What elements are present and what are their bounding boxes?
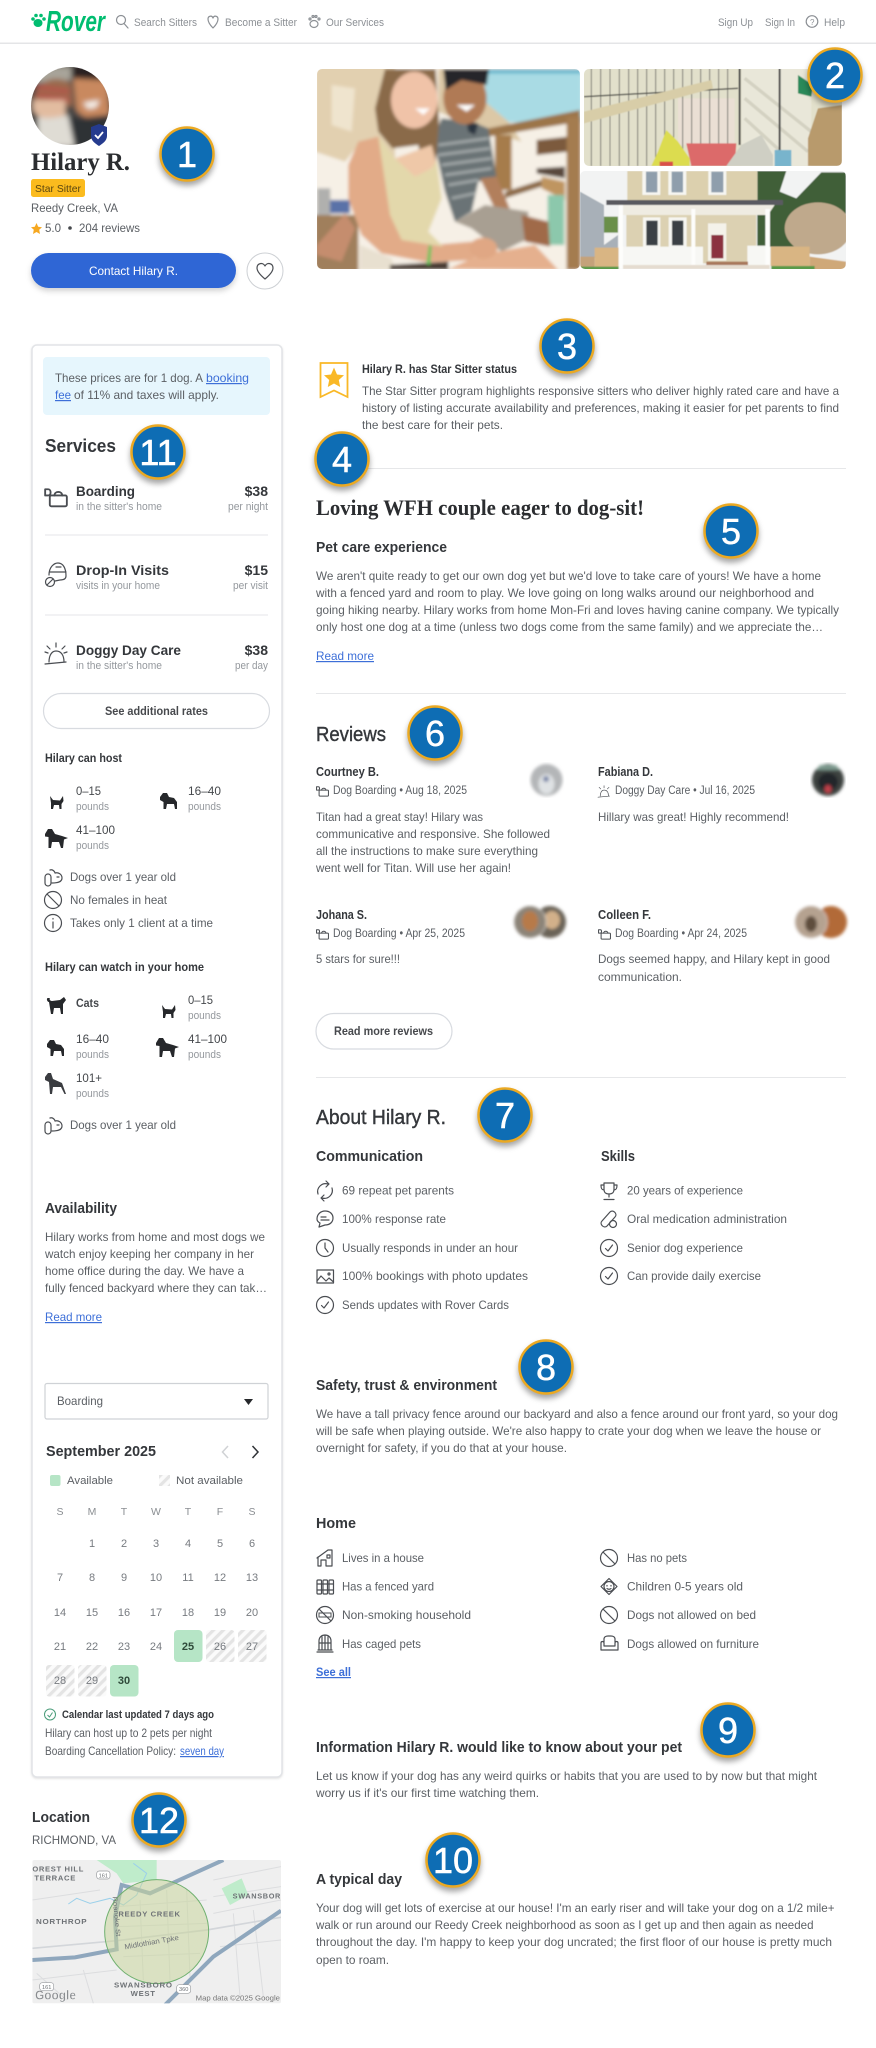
panel: services and availability card (32, 345, 282, 1777)
map (32, 1860, 281, 2005)
review: Fabiana D.: Fabiana D. (598, 765, 653, 779)
section: about hilary: About Hilary R. (316, 1107, 446, 1129)
item: rover cards: Sends updates with Rover Cards (342, 1298, 509, 1312)
nav: become a sitter: Become a Sitter (225, 17, 297, 29)
price notice: These prices are for 1 dog. A (55, 371, 203, 385)
review: Colleen F. (598, 906, 847, 984)
section: availability text (44, 1200, 267, 1324)
item: caged pets: Has caged pets (342, 1637, 421, 1651)
star sitter tag (31, 179, 85, 197)
map: REEDY CREEK (118, 1910, 181, 1919)
callout badge 3: 3 (557, 326, 577, 367)
calendar day cells: 15 (86, 1607, 98, 1619)
review: Fabiana D.: Doggy Day Care • Jul 16, 2025 (615, 785, 755, 797)
section: availability text: watch enjoy keeping her company in her (44, 1247, 254, 1261)
item: repeat pet parents (318, 1181, 454, 1201)
section: location: Location (32, 1809, 90, 1826)
size: 16-40 pounds: 16–40 (188, 784, 221, 798)
price notice: booking (206, 371, 249, 385)
sitter name: Hilary R. (31, 149, 130, 176)
host condition: no females in heat: No females in heat (70, 893, 168, 907)
calendar legend: Available (67, 1475, 113, 1487)
map: OREST HILL (32, 1865, 84, 1874)
calendar footer notes: seven day (180, 1744, 224, 1758)
item: house (317, 1550, 424, 1566)
item: fenced yard: Has a fenced yard (342, 1580, 434, 1594)
profile headline: Loving WFH couple eager to dog-sit! (316, 495, 644, 520)
calendar day cells: 18 (182, 1607, 194, 1619)
item: senior dogs: Senior dog experience (627, 1241, 743, 1255)
calendar day cells: 22 (86, 1641, 98, 1653)
review: Johana S.: 5 stars for sure!!! (316, 952, 400, 966)
star sitter status block: The Star Sitter program highlights responsive sitters who deliver highly rated care and have a (362, 384, 839, 398)
callout badge 7 (478, 1088, 532, 1142)
watch condition: age: Dogs over 1 year old (70, 1118, 176, 1132)
price notice: fee (55, 388, 71, 402)
calendar day cells: 2 (121, 1538, 127, 1550)
callout badge 1: 1 (177, 134, 197, 175)
photo: house with porch (578, 168, 851, 272)
calendar day cells: W (151, 1506, 161, 1518)
contact button: Contact Hilary R. (89, 264, 178, 278)
item: response time: Usually responds in under an hour (342, 1241, 518, 1255)
size: 41-100 pounds: 41–100 (188, 1032, 227, 1046)
section: a typical day: walk or run around our Reedy Creek neighborhood as soon as I get up and then again as needed (315, 1918, 814, 1932)
callout badge 6 (408, 706, 462, 760)
favorite heart button (247, 253, 283, 289)
item: response rate: 100% response rate (342, 1212, 446, 1226)
nav: our services (309, 16, 384, 29)
review: Colleen F.: communication. (598, 970, 682, 984)
section: safety, trust and environment: We have a tall privacy fence around our backyard and also a fence around our front yard, so your dog (316, 1407, 838, 1421)
calendar day cells: 29 (86, 1675, 98, 1687)
calendar day cells: 1 (89, 1538, 95, 1550)
size: 0-15 pounds: pounds (76, 801, 109, 813)
item: rover cards (316, 1296, 509, 1314)
sitter avatar photo (31, 67, 109, 145)
calendar day cells: S (248, 1506, 256, 1518)
review: Courtney B.: went well for Titan. Will use her again! (315, 861, 511, 875)
size: 16-40 pounds: 16–40 (76, 1032, 109, 1046)
callout badge 4 (316, 432, 368, 486)
section: hilary can watch in your home: Hilary can watch in your home (45, 960, 204, 974)
calendar legend (50, 1475, 243, 1487)
section: availability text: fully fenced backyard where they can tak… (45, 1281, 267, 1295)
callout badge 11: 11 (139, 432, 177, 473)
section: a typical day: Your dog will get lots of exercise at our house! I'm an early riser and will take your dog on a 1/2 mile+ (316, 1901, 834, 1915)
price notice (43, 357, 270, 415)
map: Midlothian Tpke (124, 1933, 180, 1951)
review: Colleen F.: Dogs seemed happy, and Hilary kept in good (598, 952, 830, 966)
map: SWANSBOR (233, 1891, 281, 1900)
calendar day cells: 7 (57, 1572, 63, 1584)
item: bed rule (600, 1606, 756, 1624)
callout badge 3 (540, 320, 594, 372)
calendar day cells: 10 (150, 1572, 162, 1584)
callout badge 8: 8 (536, 1347, 556, 1388)
section: availability text: Hilary works from home and most dogs we (45, 1230, 265, 1244)
size: 41-100 pounds (45, 823, 115, 852)
service: drop-in visits: per visit (233, 580, 268, 592)
section: pet care experience (315, 539, 839, 663)
size: 41-100 pounds: 41–100 (76, 823, 115, 837)
calendar day cells: 20 (246, 1607, 258, 1619)
photo: couple on a deck (315, 65, 582, 272)
section: pet care experience: Pet care experience (316, 539, 447, 556)
section: home: Home (316, 1515, 356, 1532)
section: pet care experience: Read more (316, 649, 374, 663)
size: 101+ pounds: 101+ (76, 1071, 102, 1085)
calendar day cells: 9 (121, 1572, 127, 1584)
section: a typical day: throughout the day. I'm happy to keep your dog uncrated; the first floor of our house is pretty much (316, 1935, 832, 1949)
review: Courtney B.: Titan had a great stay! Hilary was (316, 810, 483, 824)
calendar day cells: 3 (153, 1538, 159, 1550)
read more reviews button (316, 1014, 452, 1049)
host condition: one client: Takes only 1 client at a time (70, 916, 213, 930)
communication list (316, 1148, 528, 1314)
callout badge 11 (132, 426, 184, 478)
calendar day cells: 21 (54, 1641, 66, 1653)
section: hilary can host: Hilary can host (45, 751, 122, 765)
reviewer avatars (514, 906, 566, 938)
item: daily exercise: Can provide daily exercise (627, 1269, 761, 1283)
service: boarding: $38 (245, 483, 268, 499)
review: Colleen F.: Dog Boarding • Apr 24, 2025 (615, 928, 747, 940)
rating (31, 221, 140, 235)
review: Johana S.: Dog Boarding • Apr 25, 2025 (333, 928, 465, 940)
calendar footer notes: Hilary can host up to 2 pets per night (45, 1726, 213, 1740)
section: a typical day: open to roam. (316, 1953, 389, 1967)
calendar day cells: 25 (182, 1641, 194, 1653)
callout badge 1 (160, 128, 214, 180)
section: availability text: home office during the day. We have a (45, 1264, 244, 1278)
size: 16-40 pounds: pounds (76, 1049, 109, 1061)
size: 101+ pounds: pounds (76, 1088, 109, 1100)
item: non-smoking: Non-smoking household (342, 1608, 471, 1622)
review: Colleen F.: Colleen F. (598, 908, 651, 922)
item: response rate (317, 1211, 446, 1227)
service dropdown: Boarding (57, 1394, 103, 1408)
host condition: age: Dogs over 1 year old (70, 870, 176, 884)
service: drop-in visits: visits in your home (76, 580, 160, 592)
service: drop-in visits: $15 (245, 562, 268, 578)
pet: cats (47, 996, 99, 1014)
icon: Rover paw logo (31, 14, 46, 27)
section: hilary can host (44, 751, 221, 932)
calendar day cells: 16 (118, 1607, 130, 1619)
section: availability text: Availability (45, 1200, 118, 1217)
watch condition: age (45, 1118, 176, 1134)
calendar day cells: T (121, 1506, 128, 1518)
map: WEST (131, 1989, 156, 1998)
calendar day cells: 12 (214, 1572, 226, 1584)
calendar day cells: F (217, 1506, 223, 1518)
read more reviews button: Read more reviews (334, 1024, 433, 1038)
nav: account links: Sign Up (718, 17, 753, 29)
location: Reedy Creek, VA (31, 201, 118, 215)
service: doggy day care: $38 (245, 642, 268, 658)
service: doggy day care: Doggy Day Care (76, 642, 181, 658)
nav: account links (718, 16, 845, 29)
callout badge 4: 4 (332, 439, 352, 480)
size: 0-15 pounds: 0–15 (76, 784, 101, 798)
nav: our services: Our Services (326, 17, 384, 29)
section: information for sitter: worry us if it's our first time watching them. (315, 1786, 539, 1800)
map: Roanoke St (111, 1896, 121, 1937)
callout badge 10: 10 (433, 1840, 473, 1881)
item: bed rule: Dogs not allowed on bed (627, 1608, 756, 1622)
size: 41-100 pounds: pounds (188, 1049, 221, 1061)
star sitter status block: history of listing accurate availability and preferences, making it easier for pet parents to find (362, 401, 839, 415)
item: experience (601, 1183, 743, 1200)
service dropdown (45, 1384, 268, 1419)
calendar day cells: 28 (54, 1675, 66, 1687)
size: 41-100 pounds: pounds (76, 840, 109, 852)
callout badge 7: 7 (495, 1095, 515, 1136)
size: 0-15 pounds: 0–15 (188, 993, 213, 1007)
item: senior dogs (600, 1240, 743, 1256)
size: 0-15 pounds: pounds (188, 1010, 221, 1022)
icon: verified shield (91, 124, 107, 146)
service: drop-in visits: Drop-In Visits (76, 562, 169, 578)
see additional rates button: See additional rates (105, 704, 208, 718)
item: daily exercise (600, 1268, 761, 1284)
service: boarding: Boarding (76, 483, 135, 499)
photo: pet birds in a cage (578, 65, 845, 168)
section: location: RICHMOND, VA (32, 1833, 116, 1847)
review: Fabiana D. (598, 764, 844, 824)
calendar footer notes: Boarding Cancellation Policy: (45, 1744, 176, 1758)
section: safety, trust and environment (315, 1377, 838, 1455)
callout badge 9: 9 (718, 1710, 738, 1751)
item: house: Lives in a house (342, 1551, 424, 1565)
calendar footer notes: Calendar last updated 7 days ago (62, 1709, 214, 1721)
review: Johana S. (316, 906, 566, 966)
nav: search sitters: Search Sitters (134, 17, 197, 29)
section: pet care experience: going hiking nearby. Hilary works from home Mon-Fri and loves having canine company. We typically (316, 603, 839, 617)
callout badge 6: 6 (425, 713, 445, 754)
section: reviews (315, 724, 847, 1049)
size: 41-100 pounds (156, 1032, 227, 1061)
section: information for sitter (315, 1739, 818, 1800)
callout badge 10 (426, 1834, 480, 1886)
item: no pets (600, 1550, 687, 1566)
callout badge 2 (808, 48, 862, 102)
size: 16-40 pounds: pounds (188, 801, 221, 813)
host condition: one client (44, 914, 213, 932)
calendar day cells: M (88, 1506, 96, 1518)
callout badge 5: 5 (721, 511, 741, 552)
item: non-smoking (316, 1606, 471, 1624)
item: children: Children 0-5 years old (627, 1580, 743, 1594)
service: boarding: per night (228, 501, 268, 513)
item: repeat pet parents: 69 repeat pet parents (342, 1184, 454, 1198)
callout badge 5 (704, 504, 758, 558)
item: medication: Oral medication administration (627, 1212, 787, 1226)
reviewer avatar (812, 764, 844, 796)
calendar day cells: 17 (150, 1607, 162, 1619)
service: doggy day care (45, 642, 268, 672)
item: no pets: Has no pets (627, 1551, 687, 1565)
map: Map data ©2025 Google (196, 1994, 280, 2003)
size: 16-40 pounds (47, 1032, 109, 1061)
calendar month heading: September 2025 (46, 1443, 156, 1460)
callout badge 12 (132, 1794, 186, 1846)
section: safety, trust and environment: overnight for safety, if you do that at your house. (316, 1441, 567, 1455)
callout badge 2: 2 (825, 55, 845, 96)
size: 16-40 pounds (160, 784, 221, 813)
map: NORTHROP (36, 1917, 87, 1926)
section: pet care experience: only host one dog at a time (unless two dogs come from the same family) and we appreciate the… (316, 620, 823, 634)
service: boarding: in the sitter's home (76, 501, 162, 513)
section: information for sitter: Let us know if your dog has any weird quirks or habits that you are used to by now but that might (316, 1769, 818, 1783)
section: about hilary (316, 1107, 787, 1314)
review: Courtney B.: Dog Boarding • Aug 18, 2025 (333, 785, 467, 797)
map: Google (35, 1988, 76, 2002)
calendar day cells: 5 (217, 1538, 223, 1550)
review: Courtney B. (315, 764, 562, 875)
calendar day cells: 27 (246, 1641, 258, 1653)
star sitter tag: Star Sitter (35, 183, 81, 195)
section: a typical day (315, 1871, 834, 1967)
section: information for sitter: Information Hilary R. would like to know about your pet (316, 1739, 682, 1756)
host condition: no females in heat (44, 892, 168, 908)
calendar legend: Not available (176, 1475, 243, 1487)
section: availability text: Read more (45, 1310, 102, 1324)
review: Courtney B.: Courtney B. (316, 765, 379, 779)
calendar day cells: 13 (246, 1572, 258, 1584)
calendar day cells (46, 1506, 266, 1696)
map: SWANSBORO (114, 1981, 173, 1990)
service: doggy day care: in the sitter's home (76, 660, 162, 672)
calendar day cells: 30 (118, 1675, 130, 1687)
calendar day cells: 14 (54, 1607, 66, 1619)
photo gallery (315, 65, 851, 272)
section: safety, trust and environment: will be safe when playing outside. We're also happy to crate your dog when we leave the house or (315, 1424, 821, 1438)
skills list: Skills (601, 1148, 635, 1165)
service: drop-in visits (46, 562, 268, 592)
calendar day cells: 19 (214, 1607, 226, 1619)
calendar month heading (46, 1443, 258, 1460)
nav: account links: Help (824, 17, 845, 29)
host condition: age (45, 870, 176, 886)
calendar day cells: 6 (249, 1538, 255, 1550)
communication list: Communication (316, 1148, 423, 1165)
rating: 5.0 (45, 221, 61, 235)
section: hilary can watch in your home (45, 960, 227, 1134)
review: Johana S.: Johana S. (316, 908, 367, 922)
section: location (32, 1809, 281, 2005)
map: TERRACE (34, 1873, 76, 1882)
panel: sitter profile summary (28, 60, 283, 289)
reviewer avatars (794, 906, 847, 938)
review: Fabiana D.: Hillary was great! Highly recommend! (598, 810, 789, 824)
calendar day cells: 24 (150, 1641, 162, 1653)
item: caged pets (317, 1635, 421, 1652)
size: 0-15 pounds (162, 993, 221, 1022)
item: response time (316, 1240, 518, 1256)
size: 101+ pounds (45, 1071, 109, 1100)
calendar day cells: T (185, 1506, 192, 1518)
availability calendar (46, 1443, 266, 1696)
map: 161 (42, 1985, 51, 1991)
map: 161 (99, 1873, 108, 1879)
nav: search sitters (116, 16, 197, 29)
map: 360 (179, 1987, 188, 1993)
price notice: of 11% and taxes will apply. (74, 388, 219, 402)
section: pet care experience: We aren't quite ready to get our own dog yet but we'd love to take care of yours! We have a home (316, 569, 821, 583)
star sitter status block: Hilary R. has Star Sitter status (362, 364, 517, 376)
star sitter status block (320, 363, 839, 432)
contact button (31, 253, 236, 288)
calendar day cells: 23 (118, 1641, 130, 1653)
section: pet care experience: with a fenced yard and room to play. We love going on long walks around our neighborhood and (315, 586, 814, 600)
callout badge 9 (702, 1704, 754, 1756)
calendar day cells: 11 (182, 1572, 194, 1584)
item: photo updates: 100% bookings with photo updates (342, 1269, 528, 1283)
logo wordmark: Rover (46, 6, 106, 38)
callout badge 8 (520, 1340, 572, 1394)
see additional rates button (44, 694, 270, 728)
callout badge 12: 12 (139, 1800, 179, 1841)
calendar day cells: S (56, 1506, 64, 1518)
size: 0-15 pounds (50, 784, 109, 813)
rating: 204 reviews (79, 221, 140, 235)
calendar day cells: 8 (89, 1572, 95, 1584)
item: experience: 20 years of experience (627, 1184, 743, 1198)
service: boarding (45, 483, 268, 513)
review: Courtney B.: communicative and responsive. She followed (316, 827, 550, 841)
calendar footer notes (44, 1709, 224, 1758)
services heading: Services (45, 436, 116, 456)
section: safety, trust and environment: Safety, trust & environment (316, 1377, 497, 1394)
section: home (316, 1515, 759, 1679)
star sitter status block: the best care for their pets. (362, 418, 503, 432)
icon: star bookmark (320, 363, 348, 397)
reviewer avatar (530, 764, 562, 796)
pet: cats: Cats (76, 996, 99, 1010)
calendar day cells: 4 (185, 1538, 191, 1550)
section: reviews: Reviews (316, 724, 386, 746)
skills list (600, 1148, 787, 1284)
calendar day cells: 26 (214, 1641, 226, 1653)
header bar (0, 0, 876, 44)
nav: account links: Sign In (765, 17, 795, 29)
see all link: See all (316, 1665, 351, 1679)
item: furniture rule: Dogs allowed on furniture (627, 1637, 759, 1651)
service: doggy day care: per day (235, 660, 268, 672)
review: Courtney B.: all the instructions to make sure everything (316, 844, 538, 858)
section: a typical day: A typical day (316, 1871, 403, 1888)
nav: account links: ? (810, 18, 815, 27)
